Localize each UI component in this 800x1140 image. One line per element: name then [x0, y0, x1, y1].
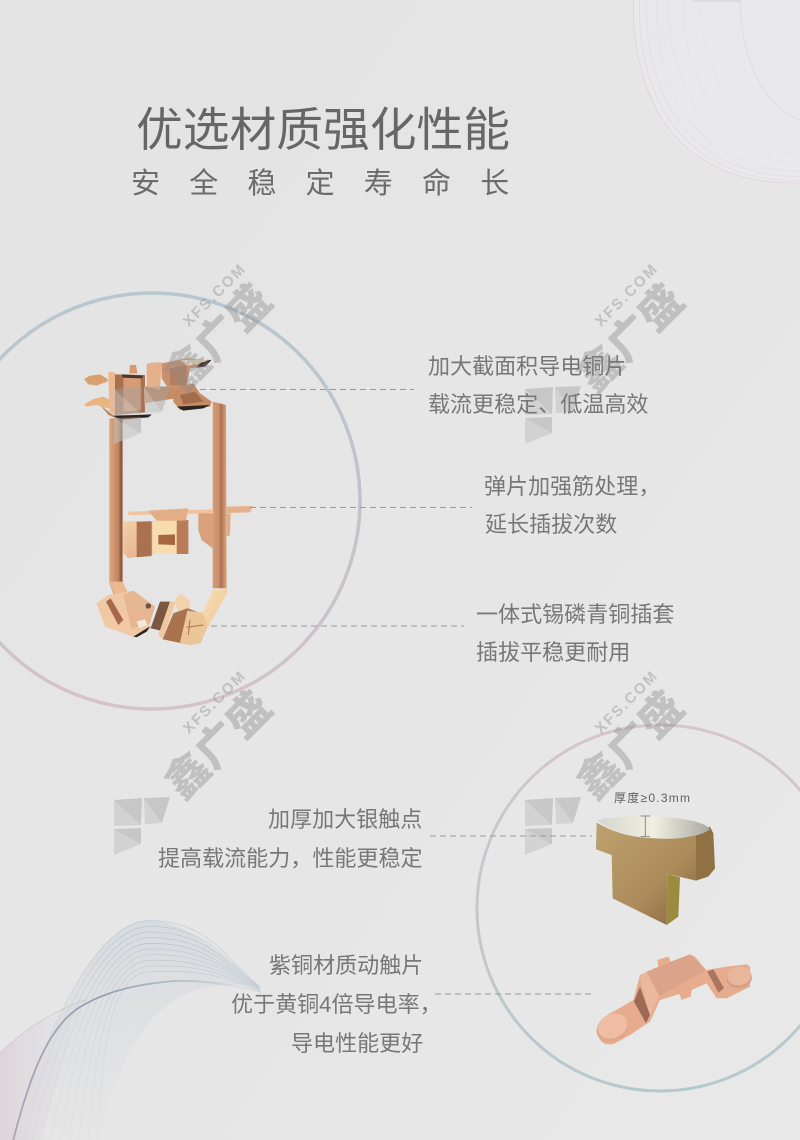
watermark text: lower left: XFS.COM [180, 667, 250, 737]
product: copper moving contact [592, 954, 754, 1047]
callout: copper moving contact: 紫铜材质动触片 [269, 953, 423, 978]
circle outline: lower right [477, 725, 800, 1091]
right rail [213, 402, 227, 588]
subtitle: 安全稳定寿命长 [131, 167, 538, 200]
decorative wave: top right [633, 0, 800, 183]
circle outline: large left [0, 293, 360, 709]
watermark text: upper right: XFS.COM [592, 260, 662, 330]
left rail [109, 418, 128, 598]
top assembly [84, 358, 212, 420]
callout: phosphor bronze socket: 一体式锡磷青铜插套 [476, 602, 674, 627]
contact front face [596, 823, 696, 925]
watermark text: upper left: XFS.COM [180, 260, 250, 330]
watermark logo: upper right [525, 386, 581, 444]
watermark text: lower right: XFS.COM [592, 667, 662, 737]
callout: silver contact: 加厚加大银触点 [268, 807, 422, 832]
product: copper conductor assembly [84, 358, 253, 645]
callout: cross-section copper [200, 354, 648, 417]
watermark text: lower right: 鑫广盛 [568, 683, 693, 808]
callout: phosphor bronze socket: 插拔平稳更耐用 [476, 640, 630, 665]
callout: cross-section copper: 加大截面积导电铜片 [428, 354, 626, 379]
lower sockets [97, 588, 227, 645]
callout: spring reinforcement [250, 474, 660, 537]
stem side face [667, 874, 680, 925]
watermark text: lower left: 鑫广盛 [156, 683, 281, 808]
watermark logo: lower right [525, 797, 581, 855]
watermark text: upper left: 鑫广盛 [156, 276, 281, 401]
callout: phosphor bronze socket [211, 602, 674, 665]
product: silver contact [596, 816, 715, 925]
middle bar [128, 509, 213, 515]
thickness label: 厚度≥0.3mm [614, 790, 690, 805]
callout: spring reinforcement: 弹片加强筋处理， [484, 474, 660, 499]
callout: cross-section copper: 载流更稳定、低温高效 [428, 392, 648, 417]
center block [123, 520, 188, 558]
decorative wave: bottom left [0, 921, 267, 1140]
callout: spring reinforcement: 延长插拔次数 [485, 512, 617, 537]
thickness gauge [641, 816, 650, 837]
callout: silver contact: 提高载流能力，性能更稳定 [158, 846, 423, 871]
silver top [597, 816, 710, 838]
title: 优选材质强化性能 [136, 104, 510, 156]
right tab [198, 513, 213, 548]
watermark logo: upper left [114, 386, 170, 444]
callout: copper moving contact: 优于黄铜4倍导电率， [231, 992, 442, 1017]
callout: copper moving contact: 导电性能更好 [291, 1031, 423, 1056]
watermark logo: lower left [114, 797, 170, 855]
callout: copper moving contact [231, 953, 595, 1056]
contact side face [693, 827, 715, 881]
watermark text: upper right: 鑫广盛 [568, 276, 693, 401]
callout: silver contact [158, 807, 592, 871]
